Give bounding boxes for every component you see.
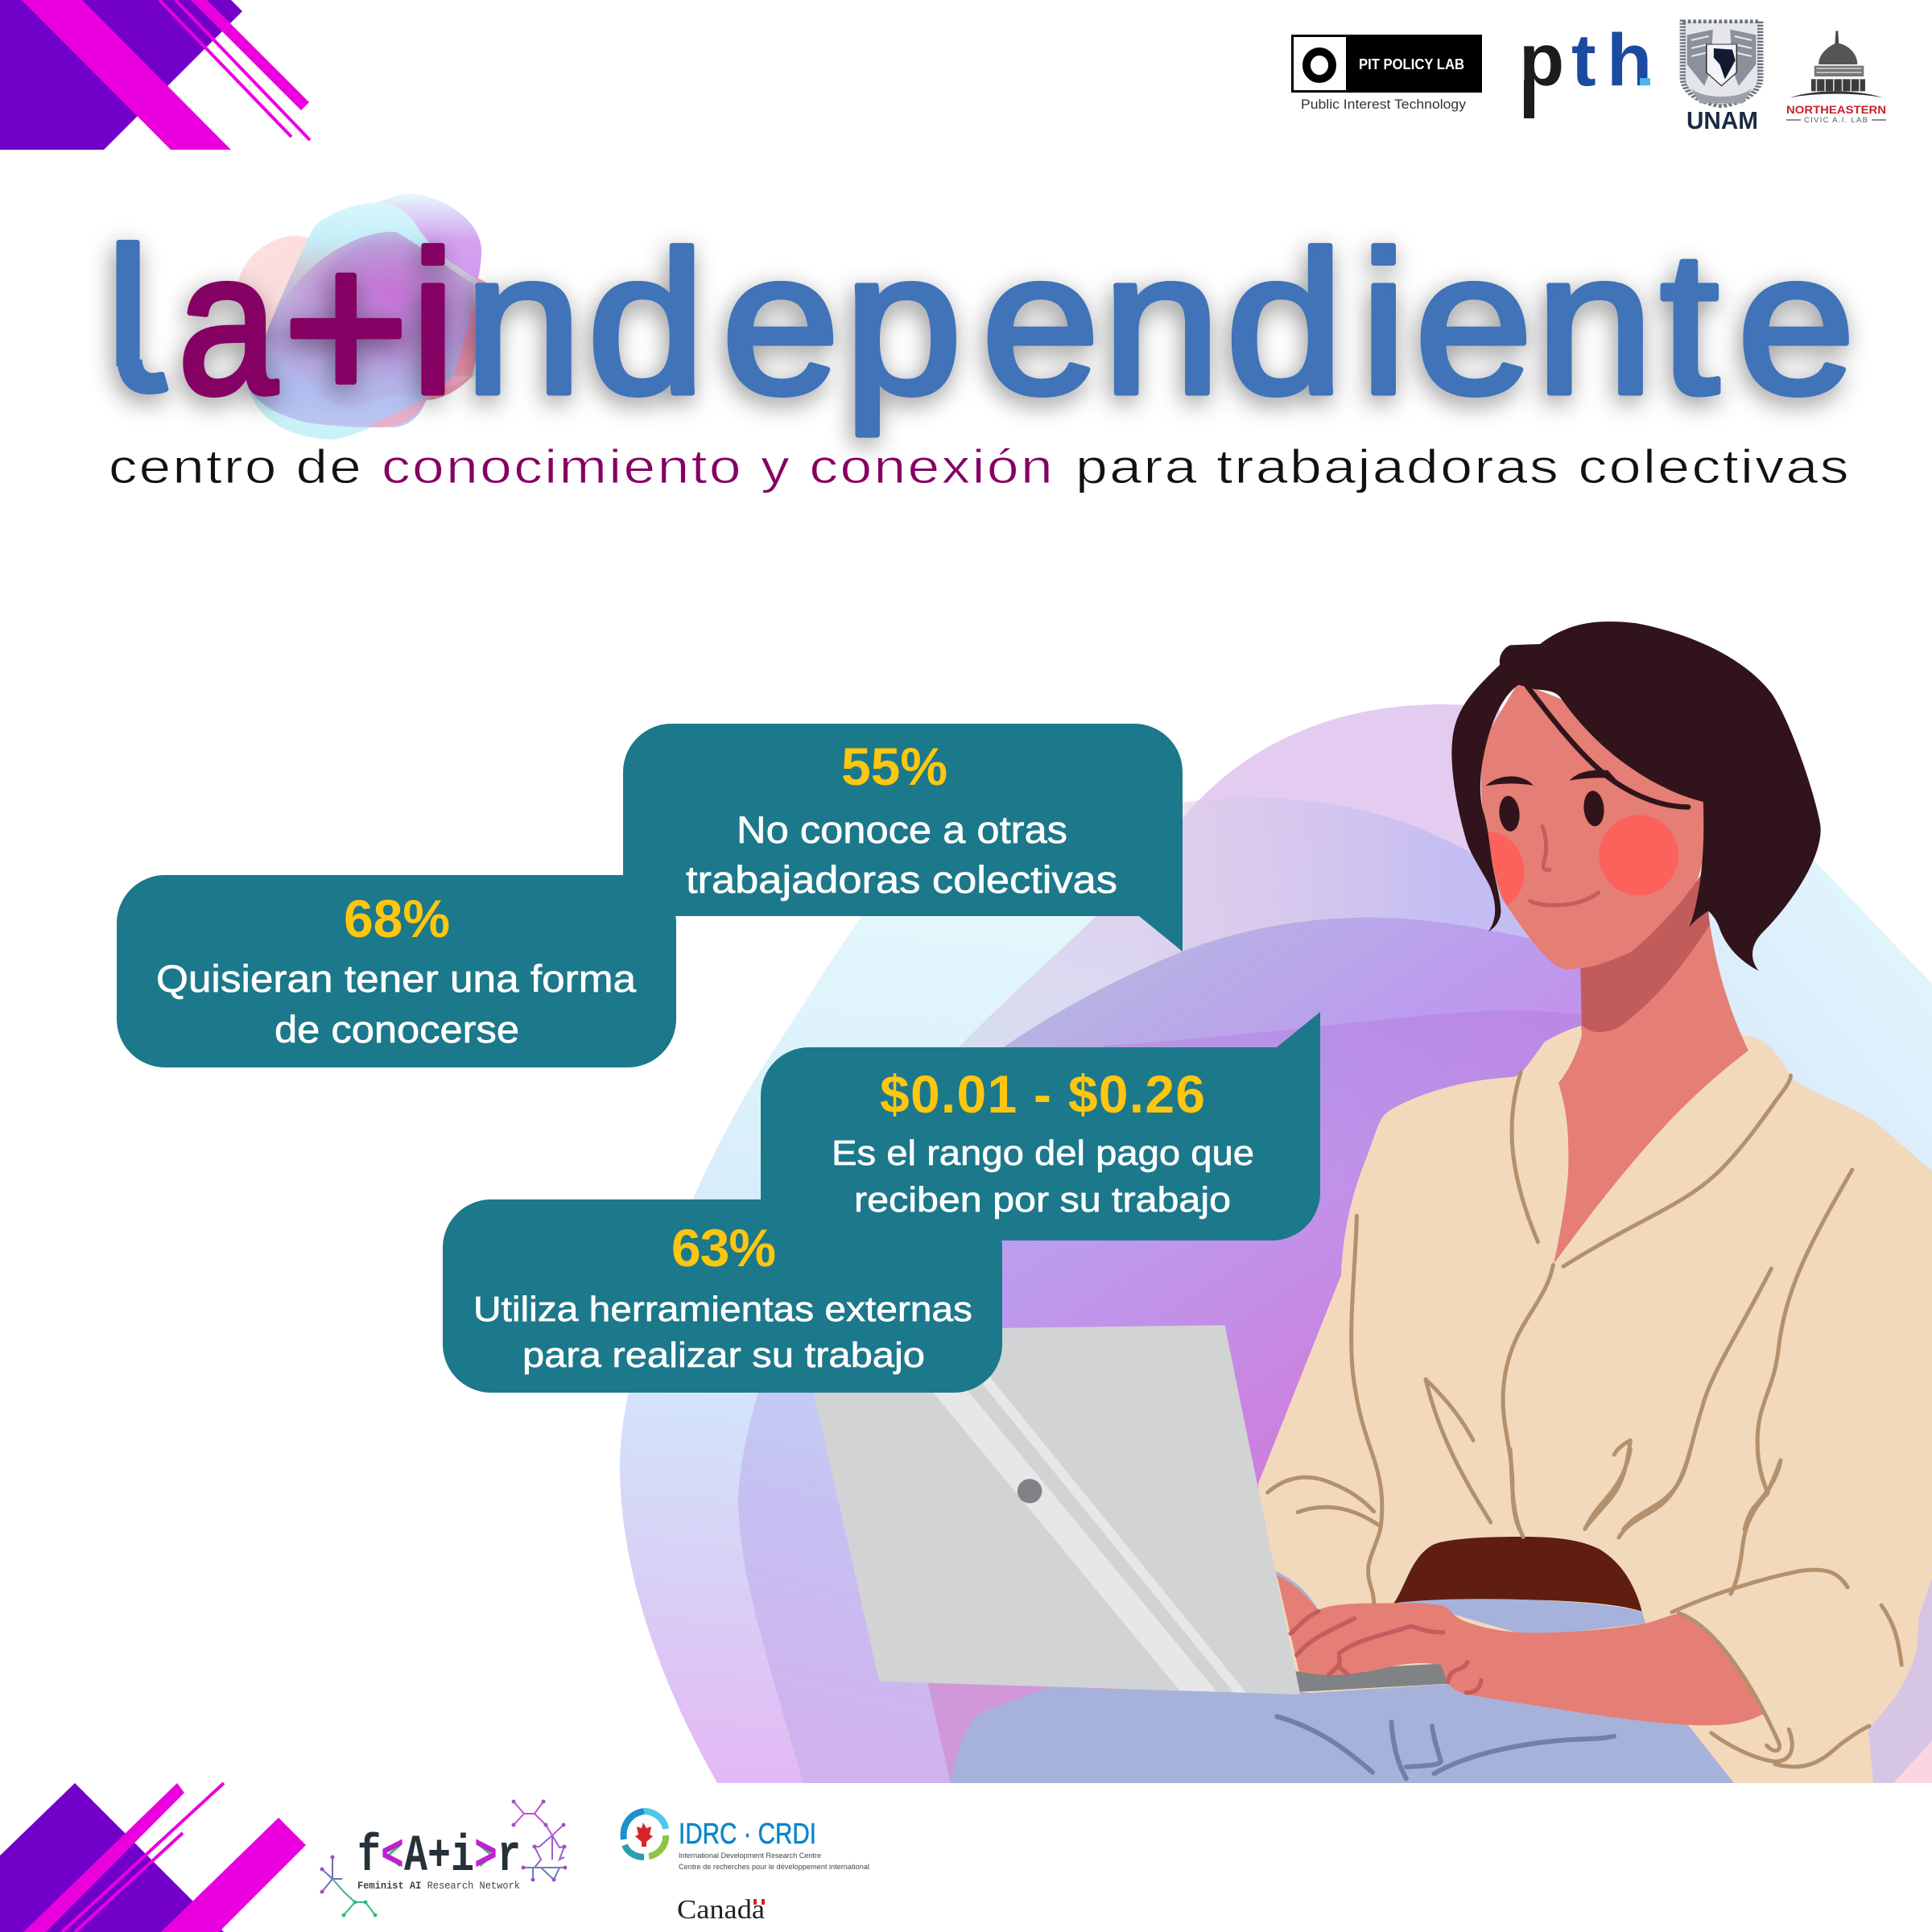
- IDRC ring: [624, 1811, 666, 1857]
- jeans: [951, 1684, 1734, 1783]
- title letter a: a: [178, 210, 278, 436]
- callout: 55%: No conoce a otras: [737, 808, 1067, 851]
- logo: PIT Policy Lab: Public Interest Technology: [1301, 97, 1467, 112]
- belly shadow: [1393, 1537, 1642, 1612]
- logo: PIT Policy Lab: PIT POLICY LAB: [1359, 56, 1464, 72]
- callout: 68%: Quisieran tener una forma: [156, 957, 637, 1000]
- logo: f<A+i>r Feminist AI Research Network: f<A+i>r: [357, 1828, 521, 1886]
- logo: f<A+i>r Feminist AI Research Network: Feminist AI Research Network: [357, 1880, 520, 1892]
- logo: IDRC CRDI and Canada: IDRC · CRDI: [679, 1817, 816, 1850]
- eyes: [1498, 790, 1605, 832]
- logo: pth: t: [1571, 19, 1596, 101]
- callout text: 63%: [473, 1218, 972, 1375]
- background gradient blobs: [620, 704, 1932, 1783]
- logo: pth: p: [1519, 19, 1564, 101]
- callout text: 63%: Utiliza herramientas externas: [473, 1290, 972, 1329]
- title blob: [238, 194, 493, 440]
- callout: pay range: $0.01 - $0.26: [880, 1064, 1205, 1124]
- logo: IDRC CRDI and Canada: [624, 1811, 869, 1925]
- network graph lower: [322, 1857, 375, 1915]
- title part: ndependiente: ndependiente: [464, 209, 1856, 437]
- callout text: 63%: 63%: [671, 1218, 776, 1278]
- decoration: bottom-left shapes: [0, 1783, 306, 1932]
- arm and hand: [1276, 1449, 1901, 1778]
- green chevrons: [388, 1845, 492, 1866]
- callout: pay range: Es el rango del pago que: [832, 1133, 1254, 1173]
- callout: 55%: [623, 724, 1183, 952]
- subtitle highlight: conocimiento y conexión: [382, 440, 1055, 493]
- title plus sign: +: [283, 205, 410, 448]
- logo: IDRC CRDI and Canada: Centre de recherches pour le développement international: [679, 1863, 869, 1872]
- title: [105, 205, 1856, 448]
- callout: pay range: [761, 1012, 1320, 1241]
- decoration: top-left shapes: [0, 0, 310, 150]
- hair: [1451, 621, 1821, 971]
- network graph upper: [514, 1802, 565, 1880]
- logo: IDRC CRDI and Canada: International Development Research Centre: [679, 1852, 821, 1860]
- subtitle part 1: centro de: [109, 440, 363, 493]
- shirt creases upper: [1268, 1072, 1852, 1530]
- logo: Northeastern Civic AI Lab: CIVIC A.I. LAB: [1804, 116, 1868, 125]
- logo: PIT Policy Lab: [1291, 35, 1482, 112]
- neck and chest: [1554, 886, 1748, 1264]
- jeans top: [1393, 1599, 1645, 1637]
- logo: UNAM: UNAM: [1686, 106, 1758, 134]
- shirt: [1258, 1026, 1932, 1783]
- network nodes: [320, 1800, 567, 1918]
- hair strand: [1527, 686, 1688, 807]
- logo: IDRC CRDI and Canada: Canada: [677, 1895, 765, 1925]
- laptop lid: [799, 1325, 1300, 1695]
- face: [1481, 682, 1706, 969]
- nose and mouth: [1530, 826, 1599, 906]
- callout: 55%: trabajadoras colectivas: [686, 858, 1117, 901]
- logo: pth: [1519, 19, 1652, 118]
- collar crease over skin edge: [1563, 1075, 1791, 1266]
- illustration: woman with laptop: [799, 621, 1932, 1783]
- logo: f<A+i>r Feminist AI Research Network: [320, 1800, 567, 1918]
- logo: UNAM: [1682, 22, 1761, 134]
- laptop keyboard: [1277, 1664, 1448, 1694]
- callout: pay range: reciben por su trabajo: [854, 1180, 1231, 1220]
- logo: Northeastern Civic AI Lab: NORTHEASTERN: [1786, 103, 1886, 116]
- callout text: 63%: para realizar su trabajo: [522, 1335, 925, 1375]
- maple leaf: [635, 1823, 653, 1847]
- callout: 68%: 68%: [344, 889, 450, 948]
- callout panel: 63%: [443, 1199, 1002, 1393]
- subtitle: [109, 440, 1851, 493]
- title letter l: l: [105, 207, 151, 433]
- subtitle part 2: para trabajadoras colectivas: [1075, 440, 1851, 493]
- cheeks: [1488, 815, 1678, 906]
- callout: 68%: de conocerse: [275, 1008, 519, 1051]
- head: [1451, 621, 1821, 1032]
- neck shadow: [1580, 874, 1710, 1032]
- logo: Northeastern Civic AI Lab: [1786, 31, 1886, 125]
- callout: 68%: [117, 875, 676, 1067]
- callout: 55%: 55%: [841, 737, 947, 796]
- eyebrows: [1485, 770, 1616, 786]
- title letter i: i: [411, 210, 456, 436]
- logo: pth: h: [1607, 19, 1652, 101]
